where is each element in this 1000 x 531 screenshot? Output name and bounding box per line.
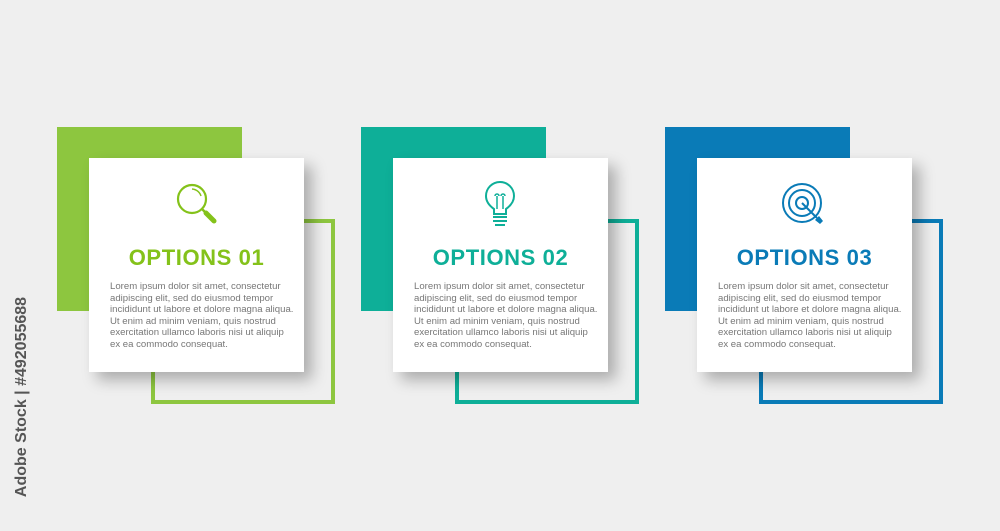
text block: exercitation ullamco laboris nisi ut aliquip	[718, 327, 892, 338]
text block: Ut enim ad minim veniam, quis nostrud	[414, 316, 580, 326]
text block: exercitation ullamco laboris nisi ut aliquip	[414, 327, 588, 338]
text block	[414, 281, 597, 350]
text block: adipiscing elit, sed do eiusmod tempor	[110, 292, 273, 304]
text block: Lorem ipsum dolor sit amet, consectetur	[718, 281, 889, 292]
icon: light bulb	[485, 181, 515, 226]
filled square: teal	[361, 127, 546, 311]
watermark: vertical stock id: Adobe Stock | #492055688	[13, 297, 30, 497]
text block	[110, 281, 293, 350]
text block: adipiscing elit, sed do eiusmod tempor	[414, 292, 577, 304]
text block: ex ea commodo consequat.	[414, 338, 532, 350]
text block: ex ea commodo consequat.	[110, 338, 228, 350]
text block: Ut enim ad minim veniam, quis nostrud	[110, 316, 276, 326]
text block: incididunt ut labore et dolore magna aliqua.	[110, 304, 293, 315]
card: option 3	[697, 158, 912, 372]
text block: incididunt ut labore et dolore magna aliqua.	[414, 304, 597, 315]
panel: option 1	[57, 127, 335, 404]
text block: Lorem ipsum dolor sit amet, consectetur	[110, 281, 281, 292]
filled square: blue	[665, 127, 850, 311]
outline square: green	[151, 219, 335, 404]
panel: option 3	[665, 127, 943, 404]
text block: Ut enim ad minim veniam, quis nostrud	[718, 316, 884, 326]
heading: OPTIONS 02	[433, 245, 568, 270]
text block: Lorem ipsum dolor sit amet, consectetur	[414, 281, 585, 292]
card: option 2	[393, 158, 608, 372]
icon: magnifier	[176, 184, 216, 224]
panel: option 2	[361, 127, 639, 404]
text block: adipiscing elit, sed do eiusmod tempor	[718, 292, 881, 304]
icon: target	[782, 183, 823, 224]
card: option 1	[89, 158, 304, 372]
text block: incididunt ut labore et dolore magna aliqua.	[718, 304, 901, 315]
outline square: blue	[759, 219, 943, 404]
heading: OPTIONS 03	[737, 245, 872, 270]
heading: OPTIONS 01	[129, 245, 264, 270]
outline square: teal	[455, 219, 639, 404]
text block: ex ea commodo consequat.	[718, 338, 836, 350]
filled square: green	[57, 127, 242, 311]
text block	[718, 281, 901, 350]
text block: exercitation ullamco laboris nisi ut aliquip	[110, 327, 284, 338]
